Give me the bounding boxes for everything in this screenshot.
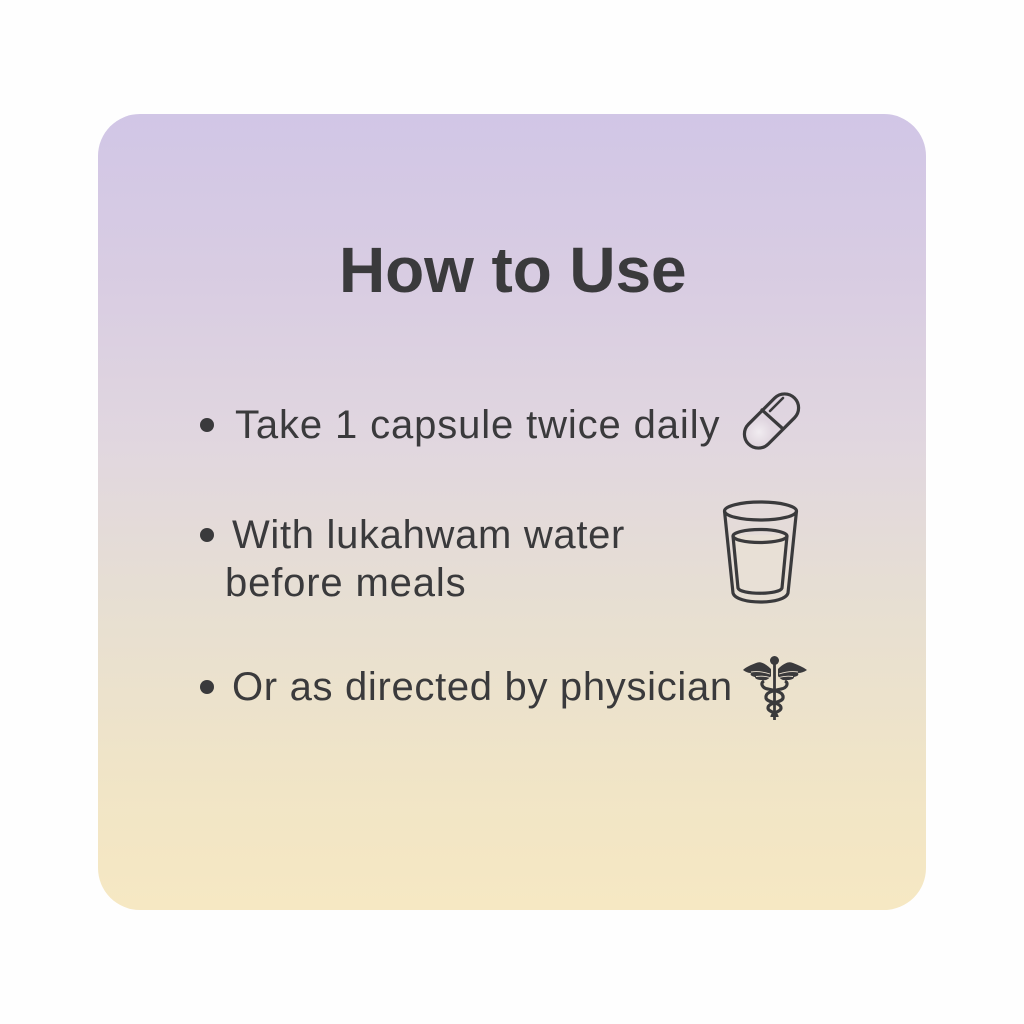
bullet item: physician: Or as directed by physician	[232, 665, 733, 709]
icon: glass of water	[722, 500, 798, 604]
icon: caduceus	[743, 656, 807, 720]
bullet item: take capsule: Take 1 capsule twice daily	[235, 403, 720, 447]
bullet item: with water: before meals	[225, 561, 466, 605]
title: How to Use	[339, 234, 686, 306]
bullet item: with water: With lukahwam water	[232, 513, 625, 557]
icon: capsule	[742, 392, 800, 450]
bullet item: with water	[200, 513, 625, 605]
panel: how to use card	[98, 114, 926, 910]
